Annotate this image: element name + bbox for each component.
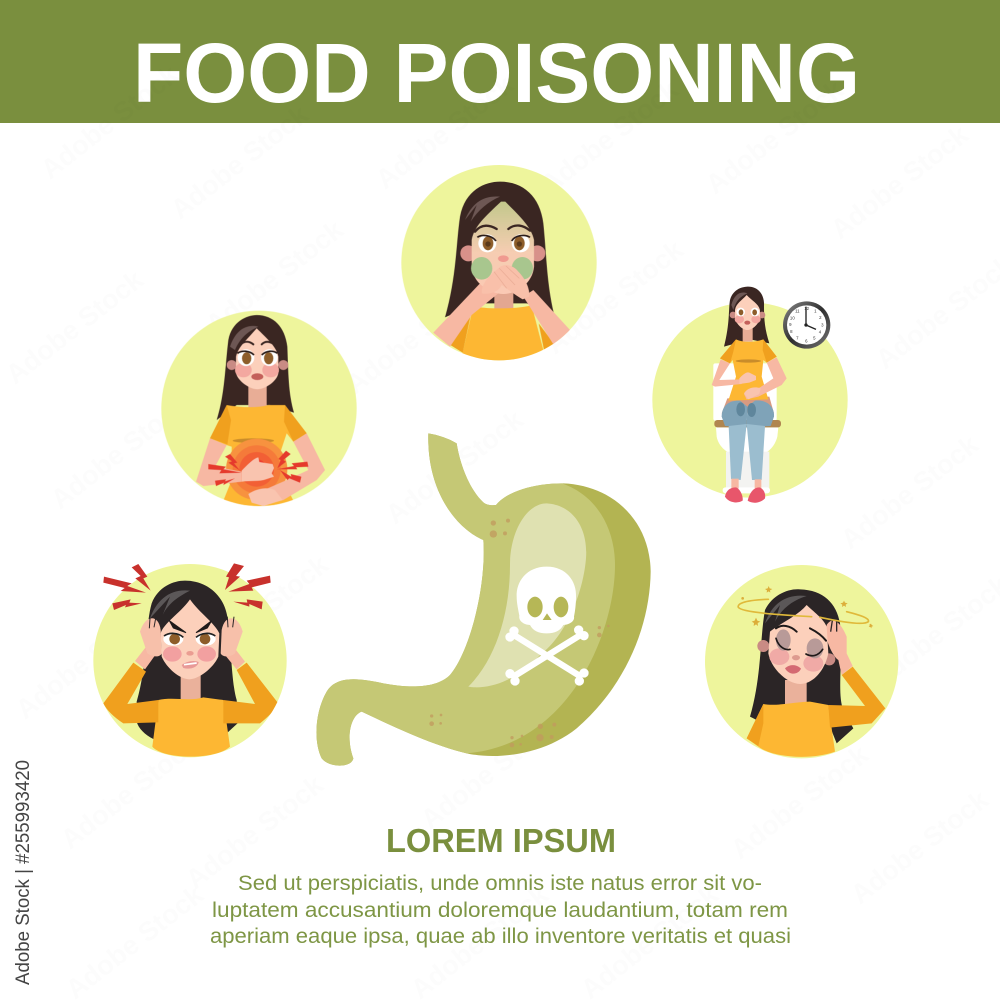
headache character bbox=[103, 581, 278, 757]
circle background bbox=[93, 564, 287, 757]
icon: wall clock: 4 bbox=[819, 329, 822, 334]
icon: wall clock: 1 bbox=[814, 308, 817, 313]
circle background bbox=[652, 302, 848, 498]
toilet character bbox=[712, 287, 787, 503]
icon: wall clock bbox=[783, 301, 830, 349]
panel: stomach pain bbox=[161, 311, 357, 506]
icon: wall clock: 6 bbox=[805, 338, 808, 343]
stomach inner highlight bbox=[468, 503, 586, 687]
icon: wall clock: 3 bbox=[821, 322, 824, 327]
stomach illustration bbox=[316, 433, 651, 766]
header banner bbox=[0, 0, 1000, 123]
body text: luptatem accusantium doloremque laudantium, totam rem bbox=[212, 899, 788, 922]
headache bolts bbox=[103, 563, 271, 610]
body text bbox=[210, 872, 791, 948]
stomach outer wall bbox=[316, 433, 651, 766]
panel: headache bbox=[93, 563, 287, 757]
icon: wall clock: 12 bbox=[804, 306, 810, 311]
icon: wall clock: 10 bbox=[790, 315, 795, 320]
toxin spots bbox=[429, 519, 610, 747]
nausea character bbox=[433, 182, 570, 363]
body text: aperiam eaque ipsa, quae ab illo inventore veritatis et quasi bbox=[210, 925, 791, 948]
icon: wall clock: 7 bbox=[796, 335, 799, 340]
circle background bbox=[401, 165, 597, 360]
icon: wall clock: 5 bbox=[813, 335, 816, 340]
stomach pain character bbox=[196, 315, 325, 506]
stomach front face bbox=[316, 433, 615, 766]
icon: wall clock: 2 bbox=[819, 315, 822, 320]
circle background bbox=[161, 311, 357, 506]
stock credit: Adobe Stock | #255993420 bbox=[13, 760, 34, 985]
toilet bbox=[713, 363, 781, 493]
pain bolts bbox=[208, 451, 308, 486]
heading: lorem ipsum: LOREM IPSUM bbox=[386, 822, 616, 859]
panel: nausea, woman covering mouth bbox=[401, 165, 597, 363]
panel: diarrhea, woman on toilet with clock bbox=[652, 287, 848, 503]
icon: wall clock: 11 bbox=[795, 309, 800, 314]
icon: skull and crossbones bbox=[505, 567, 589, 686]
icon: wall clock: 8 bbox=[790, 329, 793, 334]
body text: Sed ut perspiciatis, unde omnis iste natus error sit vo- bbox=[238, 872, 762, 895]
panel: dizziness bbox=[705, 565, 898, 758]
title: FOOD POISONING bbox=[133, 26, 860, 120]
icon: dizzy halo and stars bbox=[738, 586, 873, 628]
dizzy character bbox=[747, 589, 885, 757]
icon: wall clock: 9 bbox=[789, 322, 792, 327]
circle background bbox=[705, 565, 898, 758]
